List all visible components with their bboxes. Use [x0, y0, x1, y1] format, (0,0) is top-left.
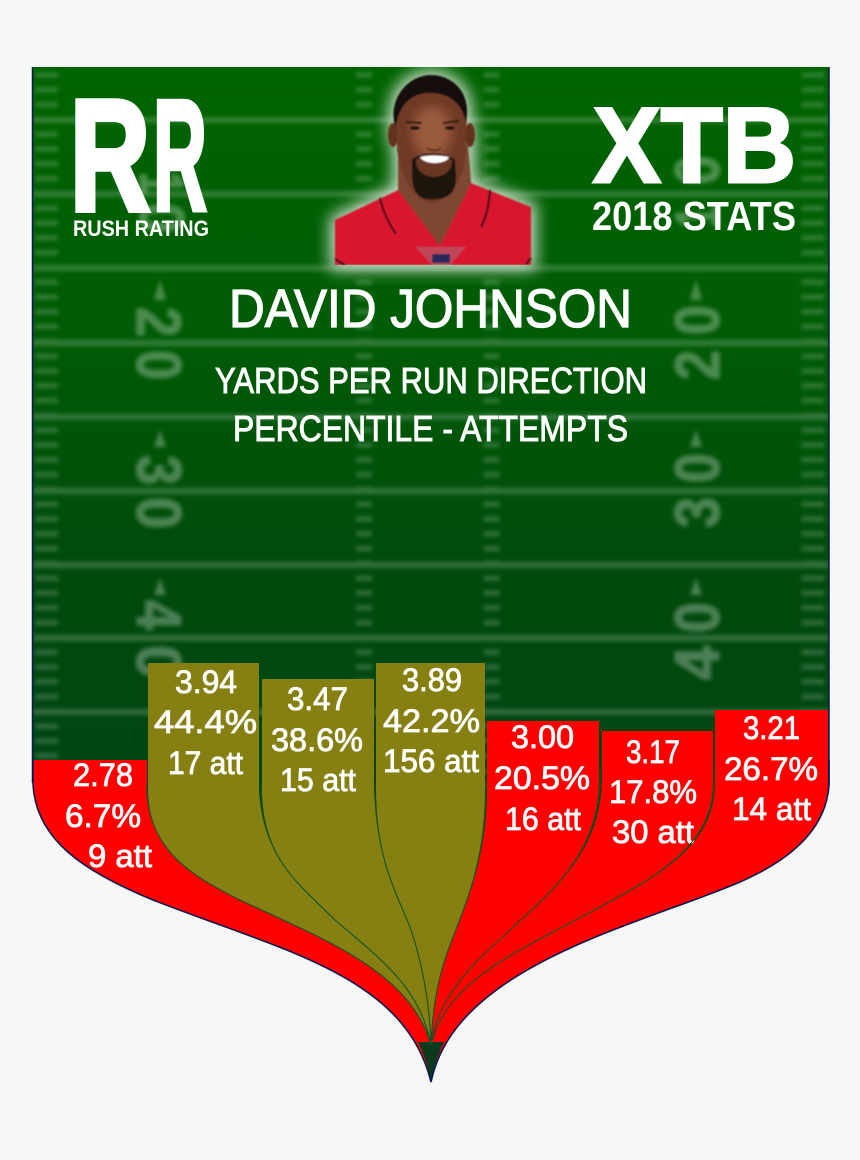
yard numbers: 0	[123, 645, 193, 679]
yard numbers: 2	[123, 307, 193, 337]
text: R	[153, 68, 207, 244]
segment 5: red: 16 att	[505, 801, 581, 837]
segment 6: red	[431, 731, 713, 1045]
yard numbers: 0	[663, 453, 733, 483]
yard numbers: 3	[123, 455, 193, 485]
segment 2: olive: 17 att	[168, 745, 243, 781]
yard numbers: 0	[663, 602, 733, 633]
segment 5: red: 20.5%	[494, 760, 590, 796]
segment 1: red: 2.78	[73, 757, 133, 793]
segment 3: olive: 15 att	[280, 762, 356, 798]
segment 2: olive: 3.94	[175, 664, 237, 700]
yard numbers: 0	[663, 305, 733, 335]
yard numbers: 2	[663, 350, 733, 380]
segment 3: olive	[262, 679, 431, 1045]
logo: XTB 2018 stats: 2018 STATS	[592, 193, 796, 239]
segment 7: red: 3.21	[743, 710, 800, 746]
segment 1: red	[33, 757, 431, 1082]
segment 6: red: 17.8%	[609, 774, 697, 810]
yard numbers: 0	[663, 155, 733, 185]
player photo	[335, 75, 531, 265]
segment 4: olive: 156 att	[383, 743, 479, 779]
yard numbers: 0	[126, 203, 196, 233]
player photo glow	[335, 75, 531, 265]
segment dividers	[147, 770, 714, 1045]
segment 4: olive: 3.89	[402, 662, 462, 698]
segment 5: red: 3.00	[511, 719, 574, 755]
football field background	[33, 67, 828, 904]
segment 2: olive	[148, 663, 431, 1045]
subtitle line 2: PERCENTILE - ATTEMPTS	[233, 408, 628, 449]
logo: Rush Rating: R	[70, 68, 150, 244]
logo: XTB 2018 stats: XTB	[593, 85, 796, 205]
yard numbers: 4	[123, 600, 193, 630]
segment 7: red: 14 att	[732, 791, 811, 827]
segment 4: olive	[376, 662, 485, 1045]
segment 5: red	[431, 719, 599, 1045]
segment 2: olive: 44.4%	[154, 704, 257, 740]
title: player name: DAVID JOHNSON	[229, 279, 632, 339]
funnel outline	[33, 760, 829, 1082]
yard numbers: 0	[123, 497, 193, 529]
yard numbers: 1	[663, 206, 733, 228]
yard numbers: 4	[663, 646, 733, 680]
segment 1: red: 6.7%	[65, 798, 141, 834]
funnel tip	[418, 1042, 444, 1082]
segment 7: red: 26.7%	[724, 751, 818, 787]
segment 3: olive: 3.47	[287, 681, 348, 717]
segment 1: red: 9 att	[88, 838, 152, 874]
segment 6: red: 30 att	[612, 814, 694, 850]
yard numbers	[123, 155, 733, 680]
yard numbers: 3	[663, 497, 733, 528]
segment 4: olive: 42.2%	[383, 703, 480, 739]
segment 7: red	[431, 710, 828, 1082]
segment 3: olive: 38.6%	[271, 722, 363, 758]
field borders	[32, 67, 829, 785]
subtitle line 1: YARDS PER RUN DIRECTION	[215, 360, 647, 401]
segment 6: red: 3.17	[626, 734, 680, 770]
yard numbers: 0	[123, 350, 193, 380]
funnel chart	[33, 662, 829, 1082]
yard numbers: 1	[126, 172, 196, 194]
logo: Rush Rating: RUSH RATING	[73, 216, 209, 241]
